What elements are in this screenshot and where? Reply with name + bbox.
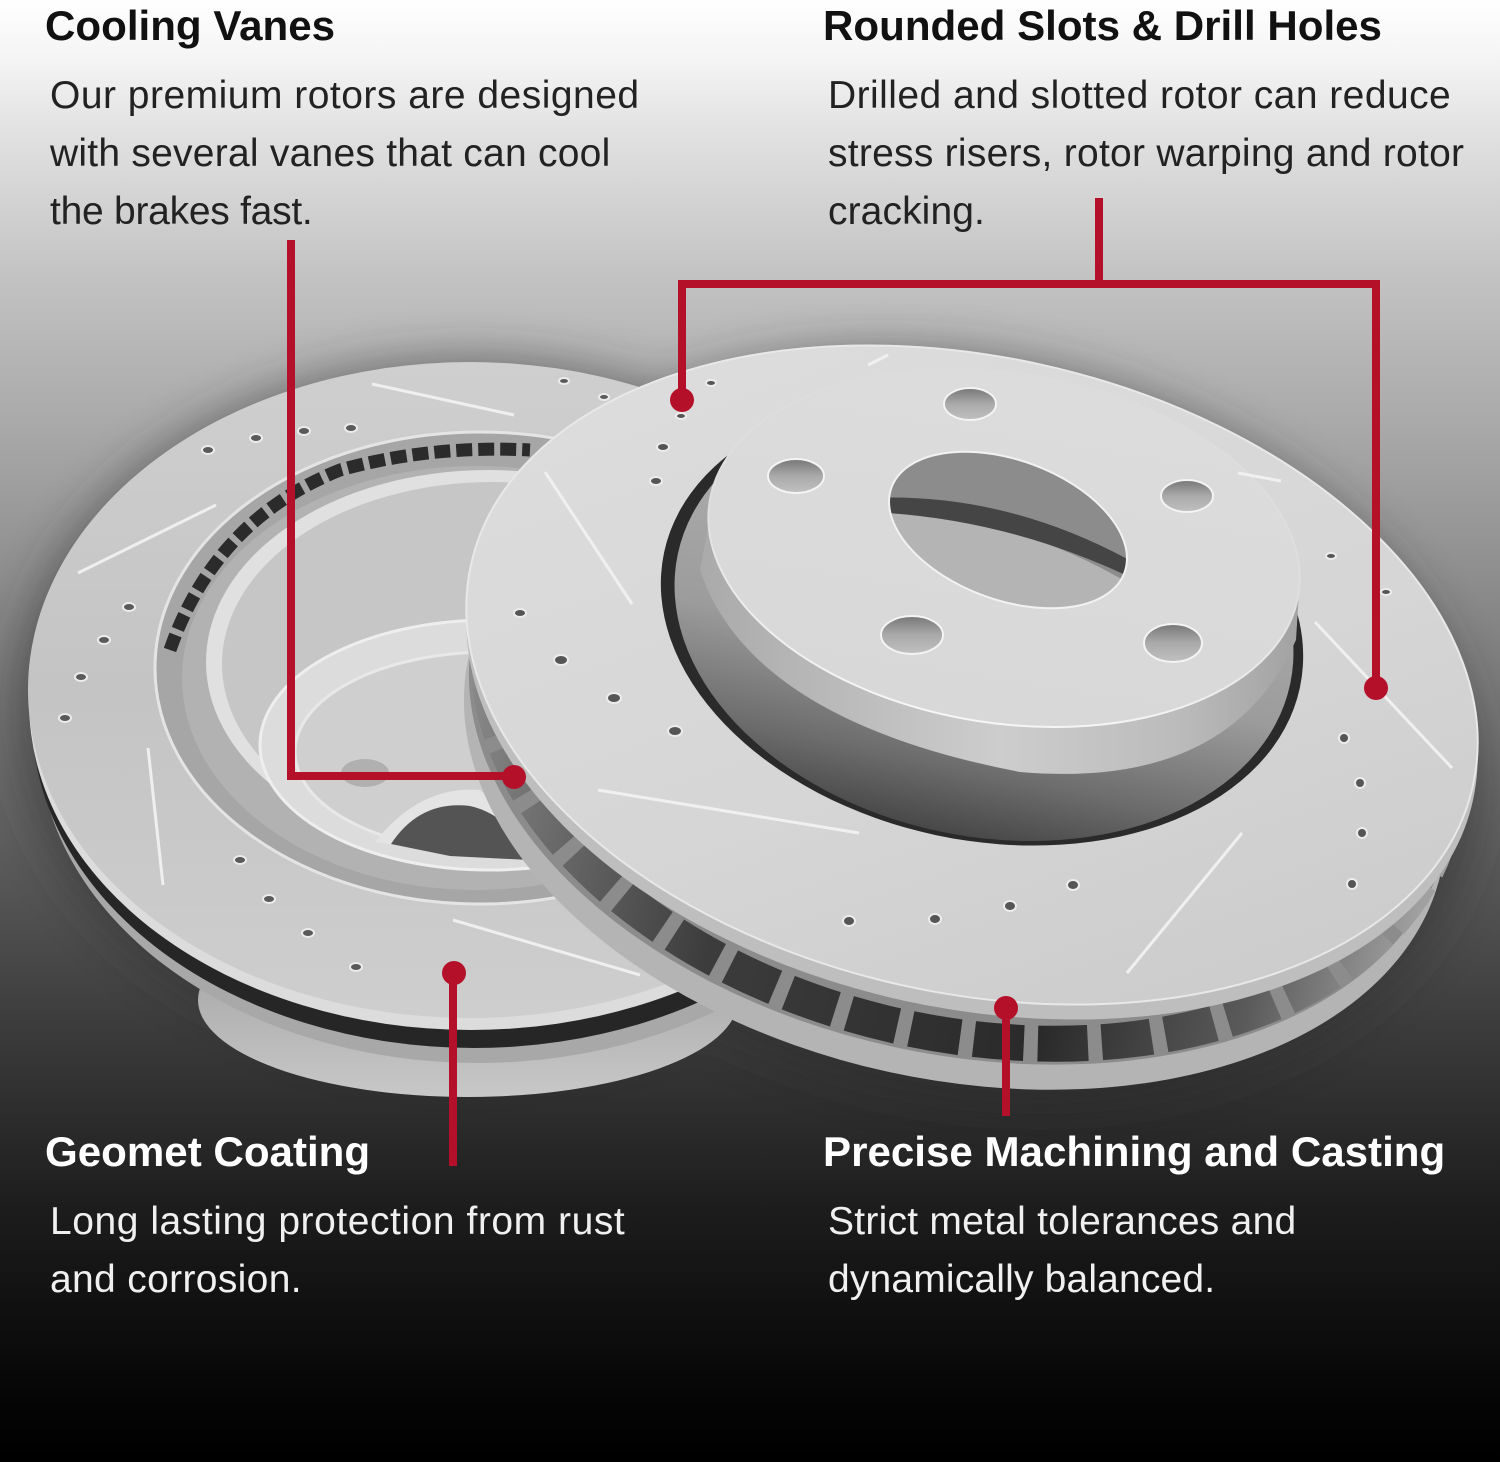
hub <box>700 387 1300 774</box>
left rotor <box>28 362 918 1097</box>
text: cooling vanes: Our premium rotors are designed <box>50 74 640 117</box>
text: rounded slots <box>828 74 1464 233</box>
text: rounded slots: cracking. <box>828 190 985 233</box>
outer lower ring <box>401 349 1500 1179</box>
hub centre bore <box>890 452 1126 608</box>
text: geomet coating: Long lasting protection from rust <box>50 1200 625 1243</box>
text: rounded slots: stress risers, rotor warping and rotor <box>828 132 1464 175</box>
callout line: cooling vanes <box>291 240 526 789</box>
text: geomet coating <box>50 1200 625 1301</box>
text: precise machining <box>828 1200 1296 1301</box>
text: geomet coating: and corrosion. <box>50 1258 302 1301</box>
text: cooling vanes: with several vanes that can cool <box>50 132 610 175</box>
right rotor <box>464 344 1479 1090</box>
text: precise machining: Strict metal tolerances and <box>828 1200 1296 1243</box>
top face <box>403 254 1500 1096</box>
text: cooling vanes <box>50 74 640 233</box>
lower hat section <box>198 903 738 1097</box>
text: cooling vanes: the brakes fast. <box>50 190 312 233</box>
text: rounded slots: Drilled and slotted rotor can reduce <box>828 74 1451 117</box>
heading: rounded slots: Rounded Slots & Drill Holes <box>823 2 1382 49</box>
callout line: geomet coating <box>442 961 466 1166</box>
callout line: precise machining <box>994 996 1018 1116</box>
callout line: rounded slots and drill holes <box>670 198 1388 700</box>
text: precise machining: dynamically balanced. <box>828 1258 1215 1301</box>
heading: cooling vanes: Cooling Vanes <box>45 2 335 49</box>
illustration: brake rotors with callout lines <box>0 198 1494 1166</box>
heading: precise machining: Precise Machining and Casting <box>823 1128 1445 1175</box>
heading: geomet coating: Geomet Coating <box>45 1128 370 1175</box>
vent band <box>406 322 1500 1154</box>
rotor shadow <box>18 257 1500 1193</box>
inner opening <box>618 337 1346 903</box>
